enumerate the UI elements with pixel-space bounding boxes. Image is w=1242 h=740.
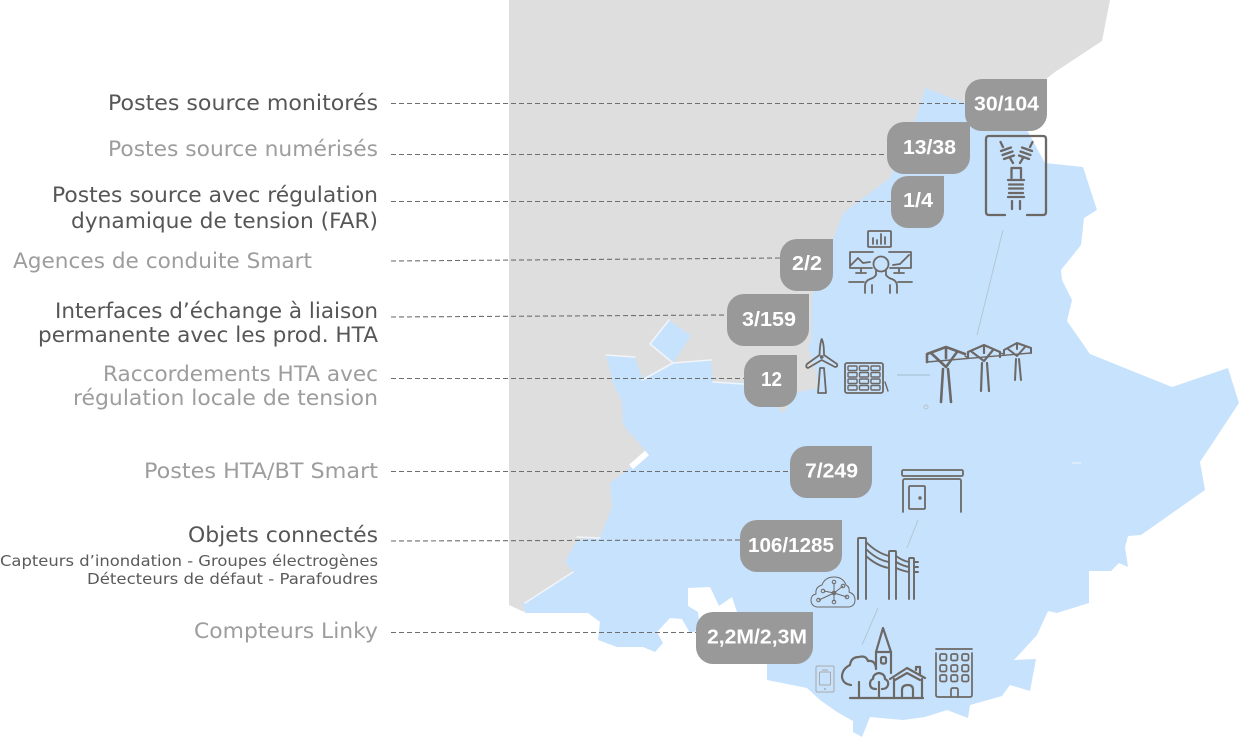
icon: HTA/BT substation [902, 470, 963, 512]
badge: 3/159: 3/159 [742, 308, 796, 331]
label: Agences de conduite Smart: Agences de conduite Smart [13, 249, 312, 274]
label: Objets connectés: Capteurs d’inondation - Groupes électrogènes [0, 552, 378, 570]
label: Objets connectés: Détecteurs de défaut - Parafoudres [87, 570, 378, 588]
badge: 2,2M/2,3M [696, 612, 813, 664]
label: Objets connectés [0, 523, 378, 588]
icon: apartment building [936, 649, 972, 697]
icon: pylons [927, 343, 1031, 402]
label: Interfaces d'échange: Interfaces d’échange à liaison [55, 299, 378, 324]
icon: solar panel [845, 363, 888, 393]
icon: Linky meter [816, 666, 834, 692]
badge: 2/2 [780, 239, 833, 291]
badge: 12: 12 [761, 368, 782, 391]
badge: 2,2M/2,3M: 2,2M/2,3M [707, 626, 807, 648]
icon: utility poles [858, 538, 918, 599]
icon: wind turbine [806, 339, 837, 393]
badge: 7/249 [790, 446, 872, 498]
label: Interfaces d'échange [38, 299, 378, 348]
label: Postes source avec régulation dynamique: dynamique de tension (FAR) [71, 209, 378, 234]
dashed leader lines [391, 104, 965, 632]
badge: 7/249: 7/249 [805, 460, 858, 482]
map: pale border highlights [525, 320, 1081, 603]
label: Compteurs Linky: Compteurs Linky [194, 619, 378, 644]
badge: 30/104: 30/104 [974, 92, 1040, 116]
badge: 106/1285 [740, 520, 842, 572]
label: Postes source avec régulation dynamique: Postes source avec régulation [52, 183, 378, 208]
faint connector lines between icons [862, 230, 1003, 645]
badge: 12 [744, 355, 797, 407]
label: Interfaces d'échange: permanente avec les prod. HTA [38, 323, 378, 348]
badge: 13/38: 13/38 [903, 136, 956, 159]
badge: 106/1285: 106/1285 [748, 534, 834, 557]
map: blue region [523, 88, 1239, 737]
label: Raccordements HTA [73, 362, 378, 411]
label: Postes HTA/BT Smart: Postes HTA/BT Smart [144, 459, 378, 484]
badge: 13/38 [887, 122, 970, 174]
map: neighbouring territory in grey [509, 0, 1110, 612]
badge: 30/104 [965, 79, 1047, 131]
icon: connected cloud [811, 577, 855, 607]
label: Objets connectés: Objets connectés [188, 523, 378, 548]
label: Postes source numérisés: Postes source numérisés [108, 137, 378, 162]
icon: control-room operator [849, 231, 912, 293]
label: Postes source monitorés: Postes source monitorés [108, 91, 378, 116]
icon: village with church, trees and house [842, 628, 925, 698]
badge: 2/2: 2/2 [792, 252, 822, 275]
label: Postes source avec régulation dynamique [52, 183, 378, 234]
icon: transformer insulator [986, 136, 1046, 215]
label: Raccordements HTA: Raccordements HTA avec [103, 362, 378, 387]
badge: 1/4 [891, 176, 944, 228]
badge: 3/159 [727, 294, 809, 346]
label: Raccordements HTA: régulation locale de tension [73, 386, 378, 411]
badge: 1/4: 1/4 [903, 189, 934, 212]
